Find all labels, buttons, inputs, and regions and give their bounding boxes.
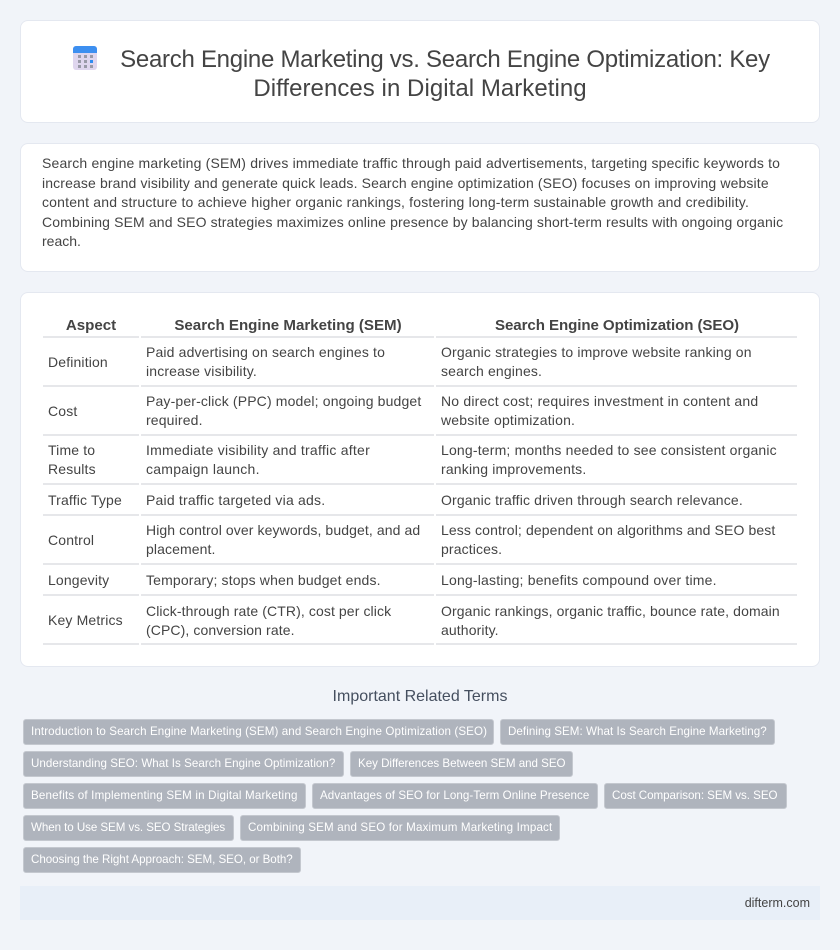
table header: Search Engine Marketing (SEM) <box>174 317 402 334</box>
related term tags: Defining SEM: What Is Search Engine Marketing? <box>508 725 767 738</box>
table row: control: practices. <box>441 541 502 557</box>
table row: traffic type: Organic traffic driven through search relevance. <box>441 492 743 508</box>
related term tags: Choosing the Right Approach: SEM, SEO, or Both? <box>31 853 293 866</box>
table row: definition: increase visibility. <box>146 363 257 379</box>
table row: definition: Organic strategies to improve website ranking on <box>441 344 752 360</box>
footer bar <box>20 886 820 920</box>
text block: introduction: Combining SEM and SEO strategies maximizes online presence by balancing short-term results with ongoing organic <box>42 214 783 230</box>
panel: comparison table <box>20 292 820 667</box>
table row: key metrics: Key Metrics <box>48 612 123 628</box>
table row: key metrics: authority. <box>441 622 499 638</box>
table row: control: placement. <box>146 541 215 557</box>
table header <box>66 317 739 334</box>
table row: definition: Definition <box>48 354 108 370</box>
related term tags: When to Use SEM vs. SEO Strategies <box>31 821 225 834</box>
icon: calendar grid <box>73 46 97 70</box>
table row: longevity: Long-lasting; benefits compound over time. <box>441 572 717 588</box>
related term tags <box>23 719 787 873</box>
table row: definition: Paid advertising on search engines to <box>146 344 385 360</box>
table row: traffic type: Paid traffic targeted via ads. <box>146 492 325 508</box>
table row: control: Control <box>48 532 94 548</box>
table row: control <box>48 522 776 557</box>
panel: introduction <box>20 143 820 272</box>
related term tags: Cost Comparison: SEM vs. SEO <box>612 789 777 802</box>
table row: time to results: ranking improvements. <box>441 461 586 477</box>
text block: introduction <box>42 155 783 249</box>
table row: traffic type <box>48 492 743 508</box>
table row: cost <box>48 393 758 428</box>
text block: introduction: content and structure to achieve higher organic rankings, fostering long-term sustainable growth and credibility. <box>42 194 749 210</box>
related term tags: Understanding SEO: What Is Search Engine Optimization? <box>31 757 335 770</box>
text block: introduction: reach. <box>42 233 81 249</box>
table grid lines <box>43 336 797 645</box>
table row: cost: Cost <box>48 403 77 419</box>
related term tags: Key Differences Between SEM and SEO <box>358 757 566 770</box>
table row: definition <box>48 344 752 379</box>
table row: time to results <box>48 442 777 477</box>
table row: time to results: Results <box>48 461 96 477</box>
table row: longevity <box>48 572 717 588</box>
panel: title card <box>20 20 820 123</box>
table row: control: Less control; dependent on algorithms and SEO best <box>441 522 775 538</box>
table row: key metrics <box>48 603 780 638</box>
text block: introduction: increase brand visibility and generate quick leads. Search engine optimization (SEO) focuses on improving website <box>42 174 769 190</box>
related term tags: Advantages of SEO for Long-Term Online Presence <box>320 789 589 802</box>
footer credit: difterm.com <box>745 896 810 910</box>
title: Search Engine Marketing vs. Search Engine Optimization: Key <box>120 46 770 73</box>
text block: introduction: Search engine marketing (SEM) drives immediate traffic through paid advertisements, targeting specific keywords to <box>42 155 780 171</box>
heading: important related terms: Important Related Terms <box>333 688 507 705</box>
table row: time to results: Time to <box>48 442 95 458</box>
table header: Aspect <box>66 317 116 334</box>
table row: time to results: Immediate visibility and traffic after <box>146 442 370 458</box>
table row: longevity: Temporary; stops when budget ends. <box>146 572 381 588</box>
table row: cost: No direct cost; requires investment in content and <box>441 393 758 409</box>
table row: traffic type: Traffic Type <box>48 492 122 508</box>
table row: cost: website optimization. <box>441 412 575 428</box>
table row: key metrics: Organic rankings, organic traffic, bounce rate, domain <box>441 603 780 619</box>
table row: definition: search engines. <box>441 363 542 379</box>
table row: key metrics: Click-through rate (CTR), cost per click <box>146 603 391 619</box>
table row: cost: Pay-per-click (PPC) model; ongoing budget <box>146 393 421 409</box>
table row: time to results: Long-term; months needed to see consistent organic <box>441 442 777 458</box>
related term tags: Combining SEM and SEO for Maximum Marketing Impact <box>248 821 552 834</box>
table row: longevity: Longevity <box>48 572 109 588</box>
table row: key metrics: (CPC), conversion rate. <box>146 622 295 638</box>
title <box>120 46 770 102</box>
table row: cost: required. <box>146 412 203 428</box>
table row: time to results: campaign launch. <box>146 461 260 477</box>
title: Differences in Digital Marketing <box>253 75 587 102</box>
table row: control: High control over keywords, budget, and ad <box>146 522 420 538</box>
table header: Search Engine Optimization (SEO) <box>495 317 739 334</box>
related term tags: Benefits of Implementing SEM in Digital Marketing <box>31 789 298 802</box>
related term tags: Introduction to Search Engine Marketing (SEM) and Search Engine Optimization (SEO) <box>31 725 487 738</box>
